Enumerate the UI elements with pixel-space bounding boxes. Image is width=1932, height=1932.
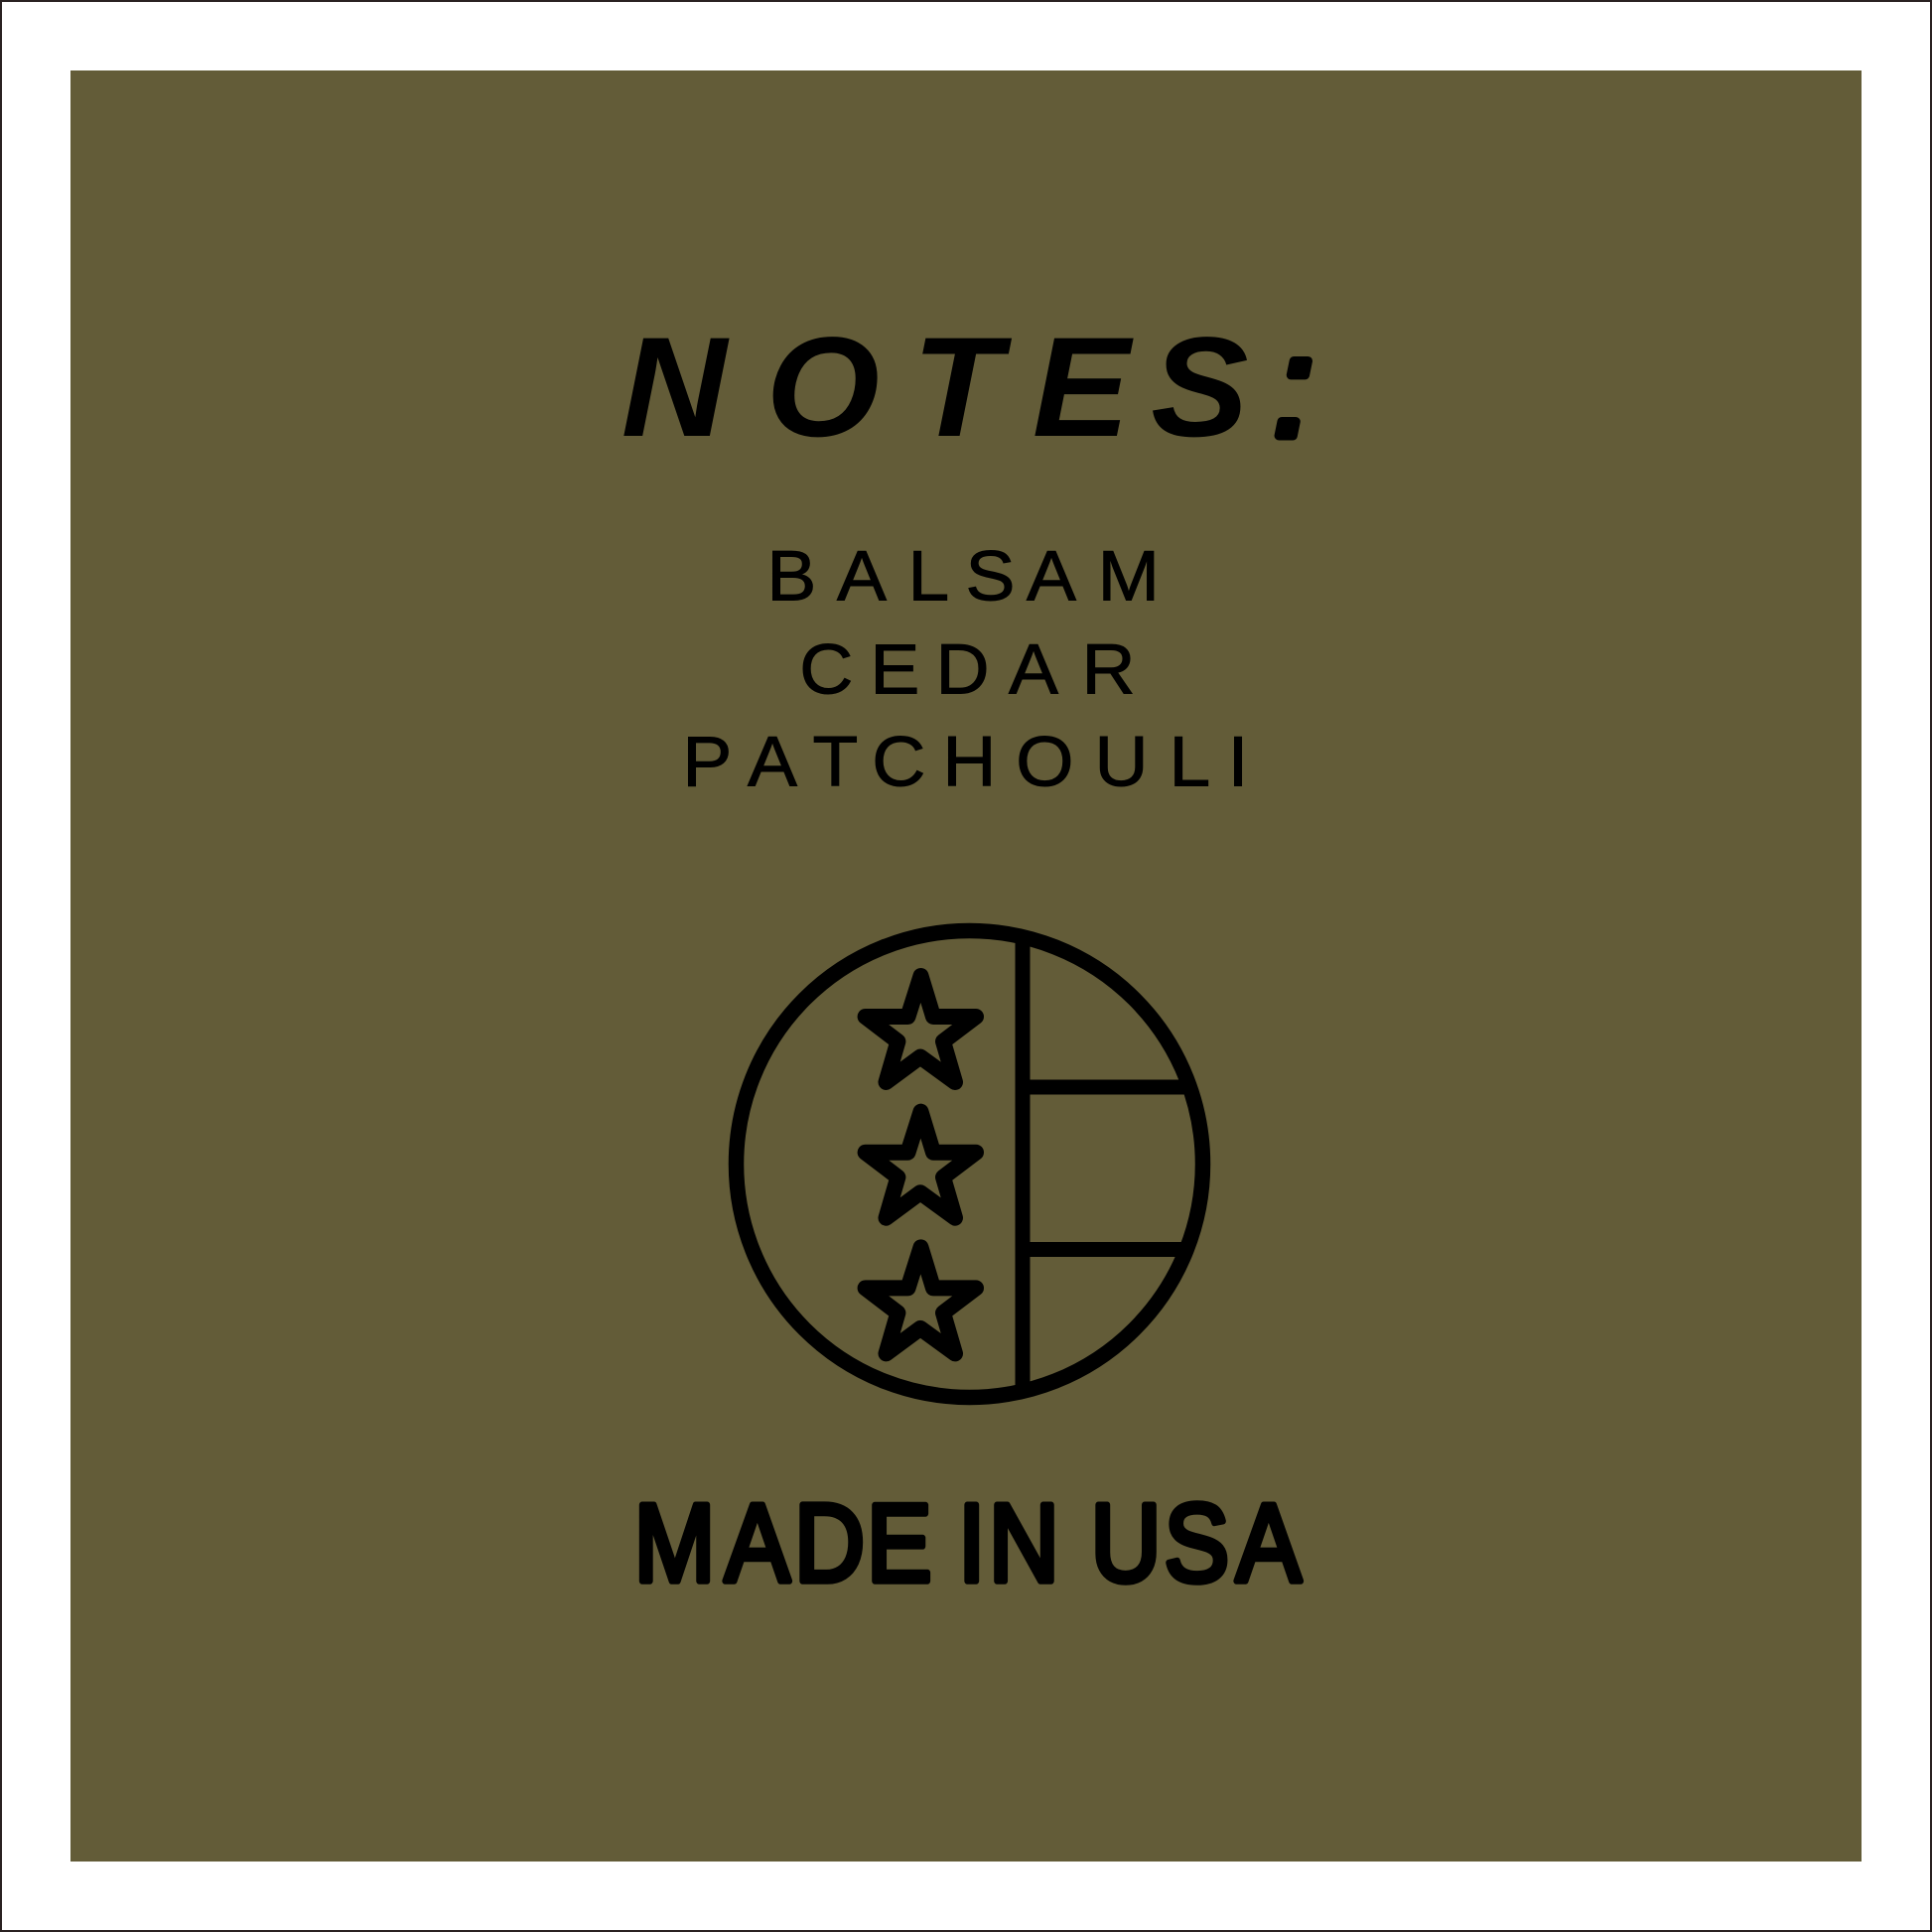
text block: list of scent notes: BALSAM [766,537,1160,616]
text: MADE IN USA: MADE IN USA [634,1482,1302,1605]
text block: list of scent notes [682,537,1248,801]
text block: list of scent notes: PATCHOULI [682,723,1248,801]
icon: circular flag emblem with three stars [737,931,1203,1398]
text block: list of scent notes: CEDAR [799,630,1136,709]
title: NOTES: NOTES: [621,308,1313,467]
